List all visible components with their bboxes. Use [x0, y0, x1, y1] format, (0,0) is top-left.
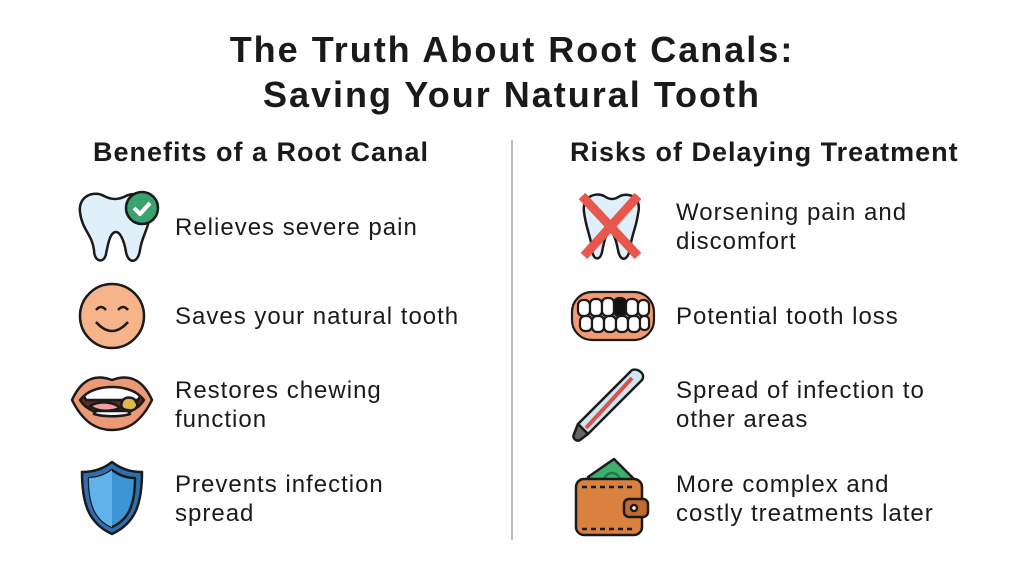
icon: teeth with gap — [570, 290, 656, 342]
divider — [511, 140, 513, 540]
text: spread — [175, 500, 254, 527]
text — [175, 377, 382, 433]
text — [676, 199, 907, 255]
text: other areas — [676, 406, 808, 433]
text: Restores chewing — [175, 377, 382, 404]
title — [230, 29, 794, 115]
text: Saves your natural tooth — [175, 303, 459, 330]
icon: wallet — [574, 458, 650, 536]
icon: tooth with check — [78, 190, 160, 262]
text: costly treatments later — [676, 500, 934, 527]
icon: mouth — [70, 376, 154, 432]
text: Relieves severe pain — [175, 214, 418, 241]
icon: tooth crossed — [578, 192, 642, 260]
text — [175, 471, 384, 527]
text: function — [175, 406, 267, 433]
title: Saving Your Natural Tooth — [263, 74, 761, 115]
text: Potential tooth loss — [676, 303, 899, 330]
text: Worsening pain and — [676, 199, 907, 226]
text — [676, 377, 925, 433]
icon: smiley — [78, 282, 146, 350]
icon: thermometer — [572, 368, 644, 442]
heading: benefits: Benefits of a Root Canal — [93, 137, 429, 167]
text: discomfort — [676, 228, 797, 255]
heading: risks: Risks of Delaying Treatment — [570, 137, 959, 167]
icon: shield — [80, 460, 144, 536]
text: Spread of infection to — [676, 377, 925, 404]
title: The Truth About Root Canals: — [230, 29, 794, 70]
text: More complex and — [676, 471, 889, 498]
text: Prevents infection — [175, 471, 384, 498]
text — [676, 471, 934, 527]
